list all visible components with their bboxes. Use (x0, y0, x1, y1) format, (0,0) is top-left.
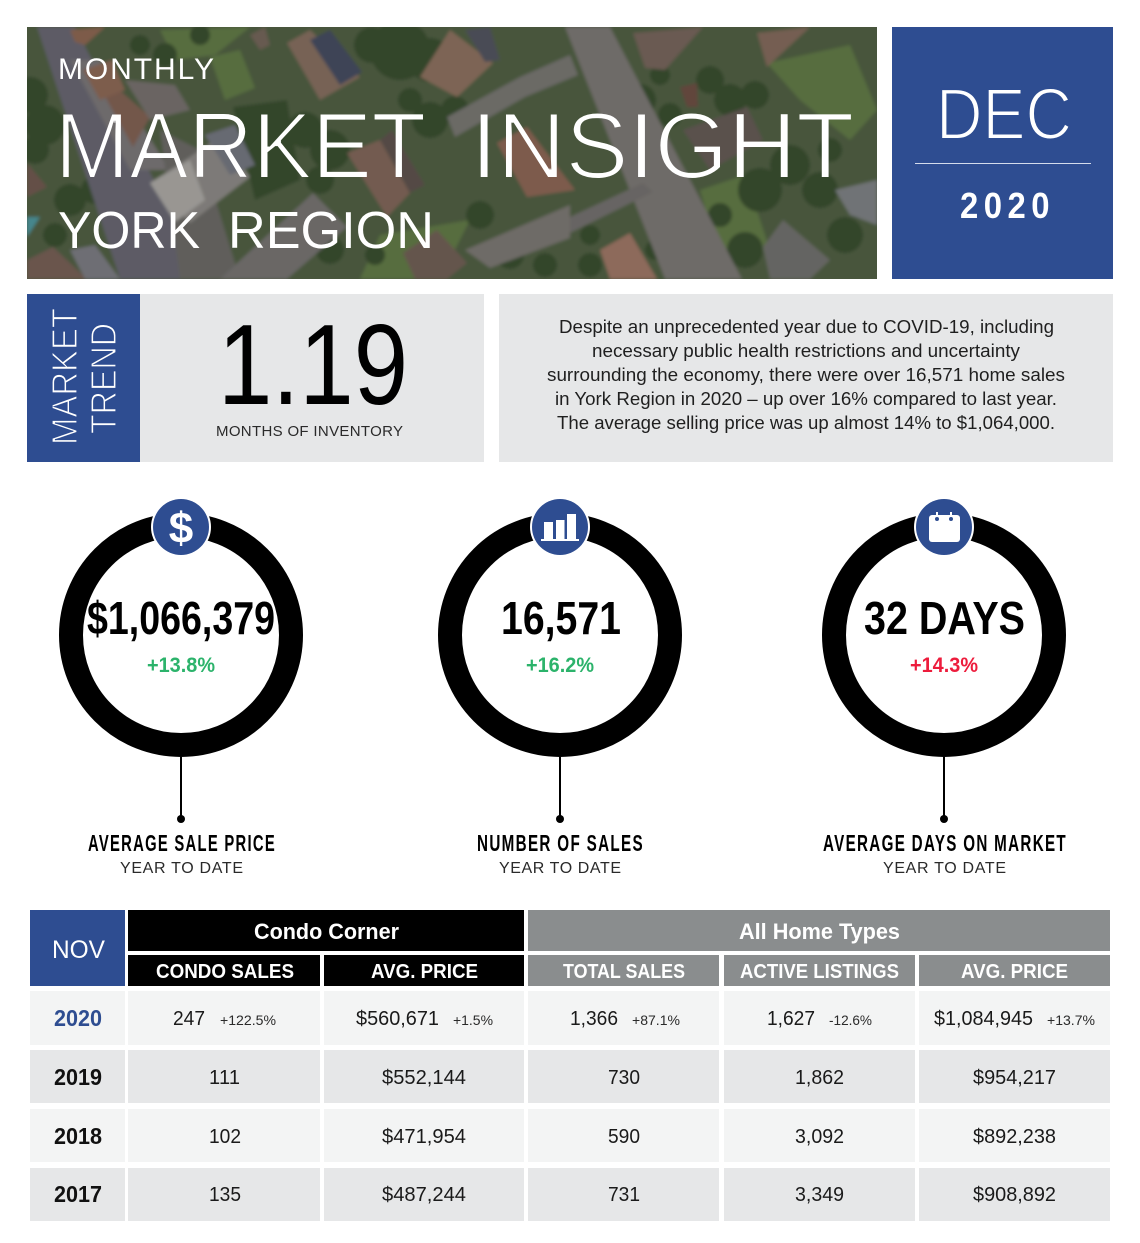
row: 2020: 1,366 (570, 1008, 618, 1030)
title: market insight (55, 93, 854, 198)
row: 2020: +87.1% (632, 1012, 680, 1028)
pavement (36, 27, 181, 279)
value: 32 DAYS (864, 592, 1025, 644)
panel: date (892, 27, 1113, 279)
row: 2018: $471,954 (382, 1126, 466, 1148)
vertical label: market trend: MARKET (44, 308, 85, 445)
sublabel: YEAR TO DATE (499, 860, 621, 877)
row: 2018: 3,092 (795, 1126, 844, 1148)
value: 16,571 (501, 592, 621, 644)
stat: number of sales (450, 497, 670, 877)
table header: TOTAL SALES (563, 961, 685, 983)
icon: dollar sign (151, 497, 211, 557)
stat: average sale price (71, 497, 291, 877)
ring (450, 525, 670, 745)
summary text (547, 317, 1065, 433)
row: 2017: 135 (209, 1184, 241, 1206)
change: +13.8% (147, 654, 215, 677)
row: 2020: 2020 (54, 1005, 102, 1031)
row: 2017: 2017 (54, 1181, 102, 1207)
pointer line (940, 757, 948, 823)
row: 2017: $908,892 (973, 1184, 1056, 1206)
row: 2017: $487,244 (382, 1184, 466, 1206)
title: market insight: INSIGHT (471, 93, 854, 198)
icon: dollar sign: $ (169, 504, 193, 553)
row: 2019: 2019 (54, 1064, 102, 1090)
row: 2018: 102 (209, 1126, 241, 1148)
label: AVERAGE SALE PRICE (88, 830, 276, 856)
ring (834, 525, 1054, 745)
month: DEC (936, 75, 1072, 155)
row: 2018: 2018 (54, 1123, 102, 1149)
row: 2020 (30, 991, 1110, 1045)
value: $1,066,379 (87, 592, 275, 644)
row: 2019: $954,217 (973, 1067, 1056, 1089)
row: 2020: +122.5% (220, 1012, 276, 1028)
row: 2020: $560,671 (356, 1008, 439, 1030)
row: 2019: $552,144 (382, 1067, 466, 1089)
row: 2019: 1,862 (795, 1067, 844, 1089)
table header: CONDO SALES (156, 961, 294, 983)
row: 2020: +1.5% (453, 1012, 493, 1028)
pointer line (177, 757, 185, 823)
row: 2020: 1,627 (767, 1008, 815, 1030)
subtitle: york region (58, 202, 434, 260)
ring (71, 525, 291, 745)
year: 2020 (960, 185, 1055, 226)
panel: market trend (27, 294, 484, 462)
subtitle: york region: YORK (58, 202, 200, 260)
sublabel: YEAR TO DATE (883, 860, 1006, 877)
panel: summary paragraph (499, 294, 1113, 462)
row: 2017: 731 (608, 1184, 640, 1206)
row: 2017: 3,349 (795, 1184, 844, 1206)
row: 2019: 111 (209, 1067, 240, 1089)
row: 2020: +13.7% (1047, 1012, 1095, 1028)
change: +16.2% (526, 654, 594, 677)
table header: All Home Types (739, 919, 900, 944)
table header: NOV (52, 936, 105, 964)
lawns (160, 27, 877, 279)
summary text: necessary public health restrictions and uncertainty (592, 341, 1020, 361)
vertical label: market trend (44, 308, 124, 445)
table header: AVG. PRICE (961, 961, 1068, 983)
table: november comparison (30, 910, 1110, 1221)
label: NUMBER OF SALES (477, 830, 644, 856)
row: 2018 (30, 1109, 1110, 1162)
row: 2019: 730 (608, 1067, 640, 1089)
title: market insight: MARKET (55, 93, 426, 198)
stat: average days on market (823, 497, 1067, 877)
row: 2018: 590 (608, 1126, 640, 1148)
summary text: Despite an unprecedented year due to COVID-19, including (559, 317, 1054, 337)
sublabel: YEAR TO DATE (120, 860, 243, 877)
summary text: surrounding the economy, there were over 16,571 home sales (547, 365, 1065, 385)
icon: bar chart (530, 497, 590, 557)
row: 2018: $892,238 (973, 1126, 1056, 1148)
icon: calendar (914, 497, 974, 557)
summary text: The average selling price was up almost 14% to $1,064,000. (557, 413, 1055, 433)
row: 2017 (30, 1168, 1110, 1221)
row: 2019 (30, 1050, 1110, 1103)
row: 2020: $1,084,945 (934, 1008, 1033, 1030)
roofs (106, 92, 150, 146)
table header (30, 910, 1110, 986)
months of inventory caption: MONTHS OF INVENTORY (216, 423, 403, 440)
vertical label: market trend: TREND (83, 323, 124, 434)
change: +14.3% (910, 654, 978, 677)
pointer line (556, 757, 564, 823)
table header: ACTIVE LISTINGS (740, 961, 899, 983)
row: 2020: -12.6% (829, 1012, 872, 1028)
kicker: monthly: MONTHLY (58, 53, 214, 86)
table header: Condo Corner (254, 919, 399, 944)
months of inventory value: 1.19 (218, 302, 408, 429)
header banner (27, 27, 877, 279)
summary text: in York Region in 2020 – up over 16% compared to last year. (555, 389, 1057, 409)
aerial photo of neighbourhood (27, 27, 877, 279)
table header: AVG. PRICE (371, 961, 478, 983)
row: 2020: 247 (173, 1008, 205, 1030)
subtitle: york region: REGION (228, 202, 434, 260)
